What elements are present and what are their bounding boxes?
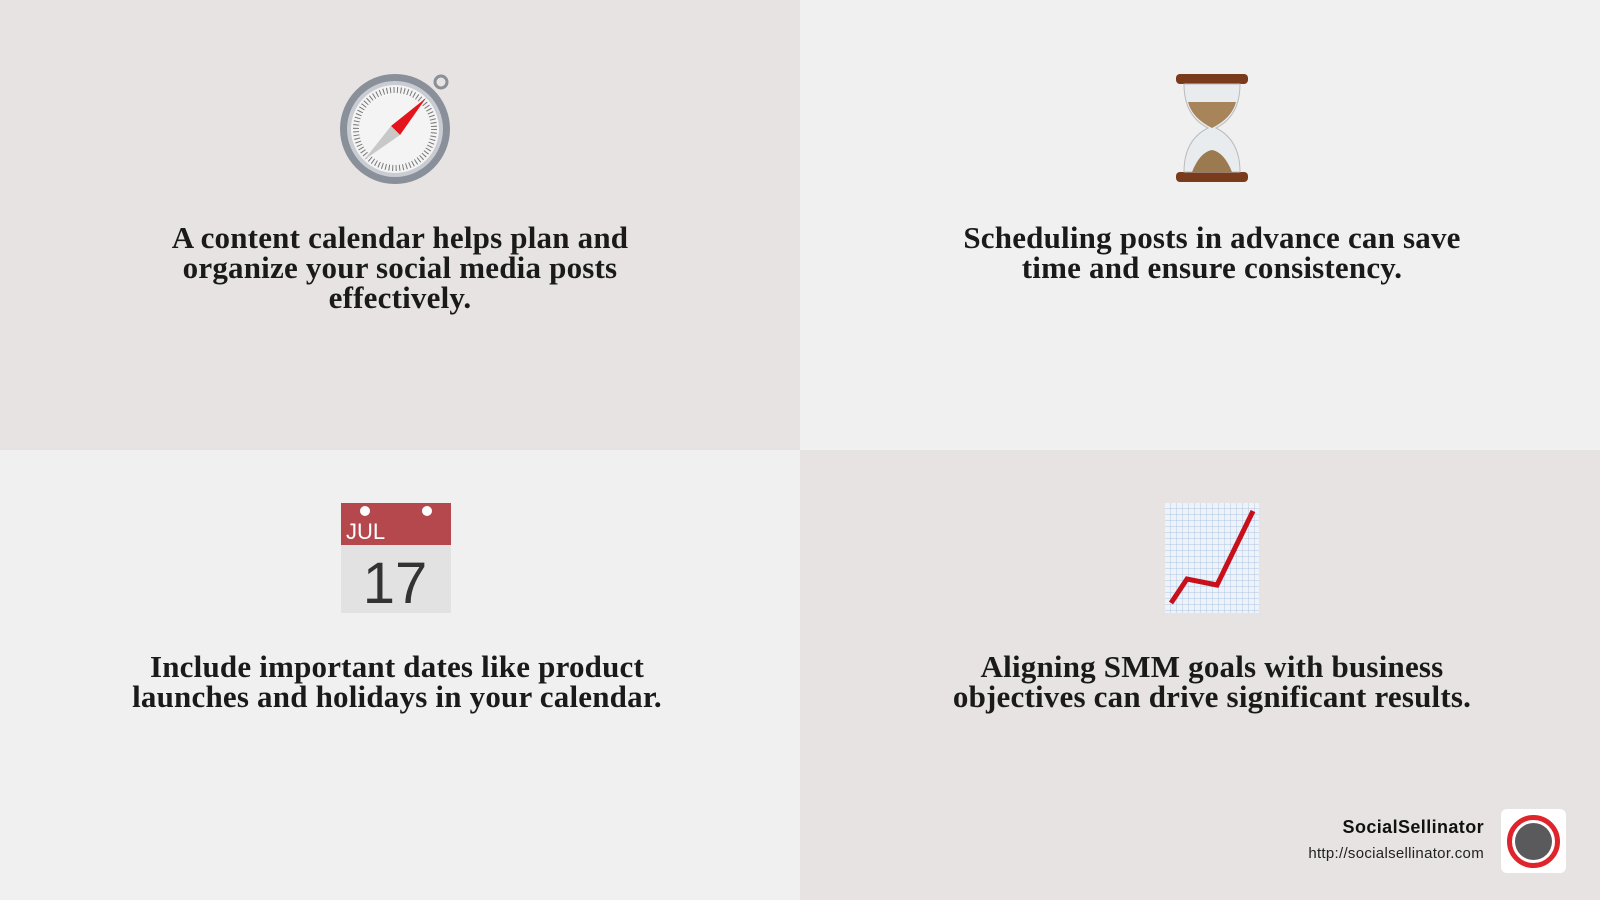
brand block (1308, 809, 1566, 873)
text: scheduling (963, 220, 1461, 285)
text: SMM goals: objectives can drive significant results. (953, 679, 1471, 714)
text: important dates: Include important dates like product (150, 649, 644, 684)
text: scheduling: time and ensure consistency. (1022, 250, 1402, 285)
icon: calendar: JUL (346, 519, 385, 544)
brand name: SocialSellinator (1343, 817, 1484, 837)
text: important dates (132, 649, 662, 714)
icon: logo (1501, 809, 1566, 873)
text: content calendar: organize your social media posts (183, 250, 617, 285)
icon: compass (340, 74, 450, 184)
panel: important dates (0, 450, 800, 900)
text: scheduling: Scheduling posts in advance can save (963, 220, 1461, 255)
icon: calendar (341, 503, 451, 615)
text: content calendar (172, 220, 628, 315)
panel: SMM goals (800, 450, 1600, 900)
panel: content calendar (0, 0, 800, 450)
icon: calendar: 17 (363, 551, 427, 615)
panel: scheduling (800, 0, 1600, 450)
icon: hourglass (1176, 74, 1248, 182)
brand url: http://socialsellinator.com (1308, 845, 1484, 862)
text: content calendar: effectively. (329, 280, 471, 315)
text: content calendar: A content calendar helps plan and (172, 220, 628, 255)
text: SMM goals (953, 649, 1471, 714)
text: important dates: launches and holidays in your calendar. (132, 679, 662, 714)
text: SMM goals: Aligning SMM goals with business (981, 649, 1443, 684)
icon: chart increasing (1165, 503, 1259, 613)
